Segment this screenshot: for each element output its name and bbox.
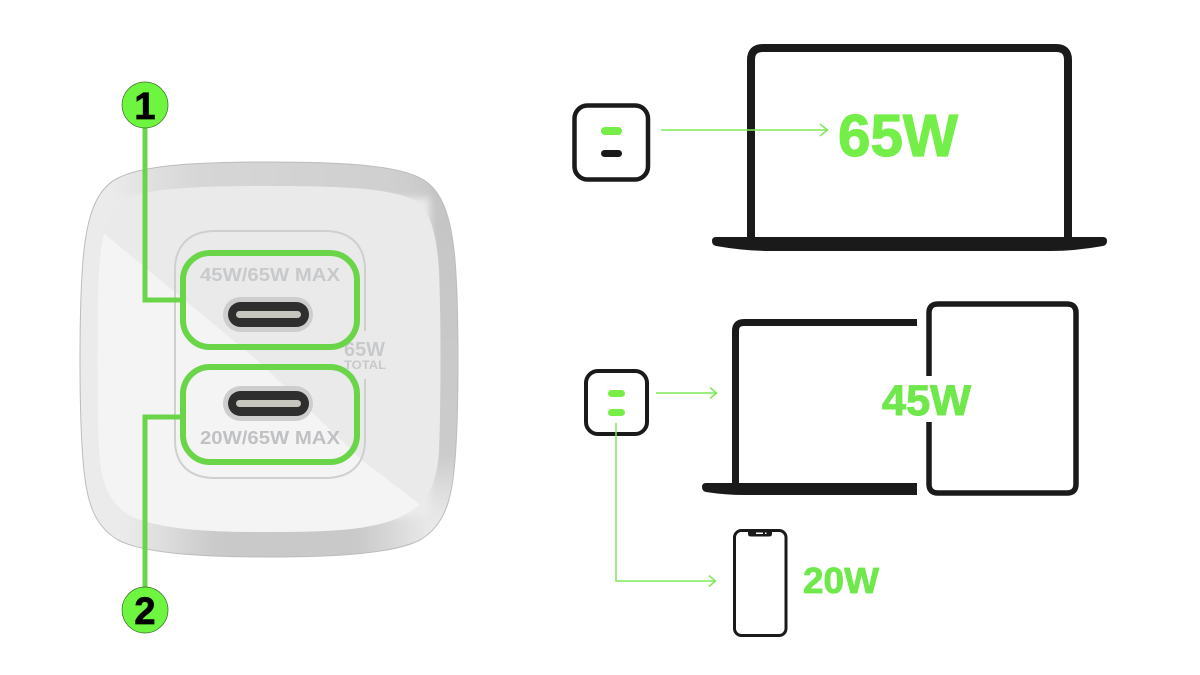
total wattage label: TOTAL (344, 360, 386, 372)
value: 20W: 20W (803, 560, 879, 601)
charger edge outline (80, 162, 458, 557)
icon: tablet (929, 304, 1076, 493)
icon: laptop partial (702, 322, 917, 495)
arrow to phone (616, 423, 716, 586)
port 1 USB-C (223, 297, 313, 332)
port recess outline (175, 231, 365, 478)
badge 1: 1 (134, 86, 156, 128)
panel: two devices 45W and 20W (586, 304, 1076, 636)
charger face (90, 180, 450, 540)
icon: charger with two active ports (586, 371, 647, 434)
value: 45W: 45W (882, 377, 971, 425)
arrow to laptop (661, 124, 828, 136)
charger outer body (75, 150, 470, 567)
leader line 2 (145, 417, 182, 592)
highlight: port 2 (183, 367, 357, 462)
value: 65W: 65W (838, 103, 958, 169)
port 2 USB-C (223, 386, 313, 421)
highlight: port 1 (183, 253, 357, 347)
port 1 label: 45W/65W MAX (200, 265, 340, 285)
infographic canvas (80, 44, 1107, 637)
arrow to laptop and tablet (656, 388, 716, 398)
leader line 1 (145, 125, 182, 300)
badge 1 (122, 82, 168, 128)
port 2 label: 20W/65W MAX (200, 428, 340, 448)
total wattage label: 65W (344, 339, 385, 361)
icon: charger with one active port (574, 106, 648, 180)
icon: laptop (712, 48, 1107, 251)
panel: charger front view (75, 82, 470, 633)
icon: phone (734, 530, 786, 636)
panel: single device 65W (574, 48, 1107, 251)
badge 2: 2 (134, 591, 156, 633)
badge 2 (122, 587, 168, 633)
total wattage label (344, 339, 386, 372)
